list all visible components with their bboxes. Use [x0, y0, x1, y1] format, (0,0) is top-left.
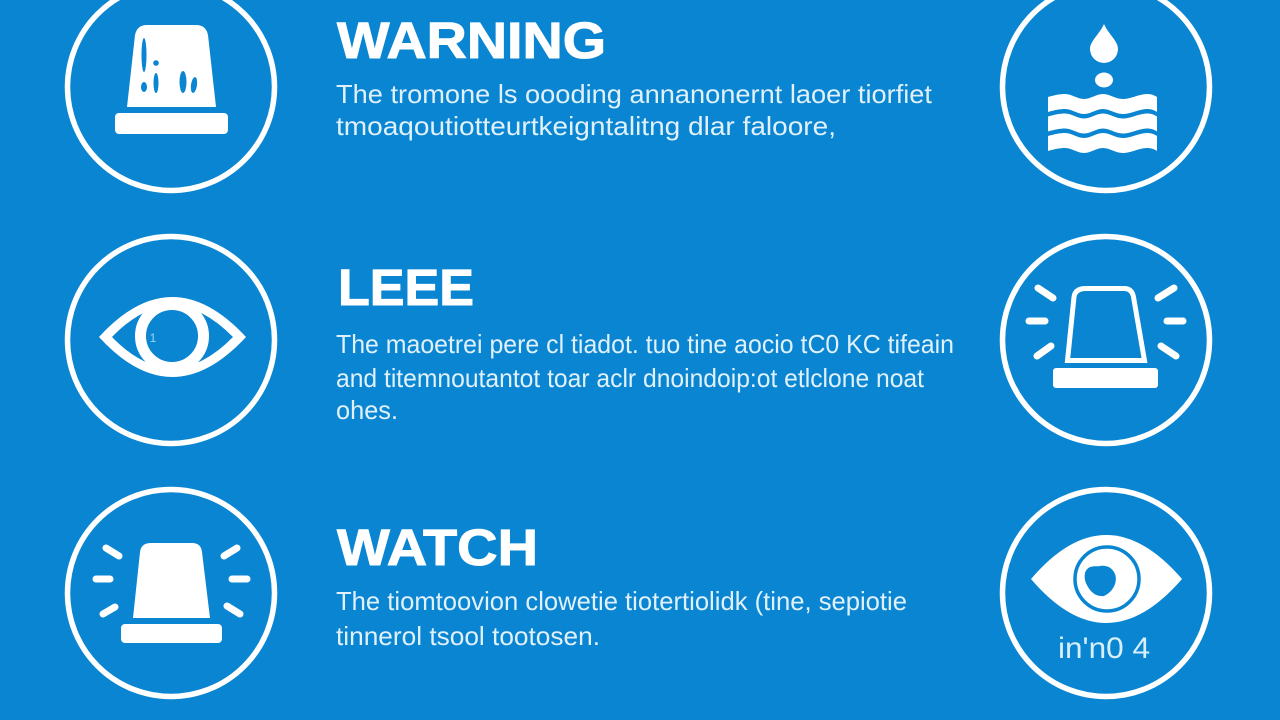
icon: solid eye with label: [1002, 490, 1210, 696]
text block: leee description: ohes.: [336, 395, 398, 425]
icon: outline eye: 1: [150, 331, 157, 345]
heading: watch: WATCH: [337, 519, 538, 576]
icon: solid eye with label: in'n0 4: [1058, 632, 1150, 665]
heading: warning: WARNING: [337, 12, 606, 69]
text block: leee description: and titemnoutantot toar aclr dnoindoip:ot etlclone noat: [336, 363, 925, 393]
text block: leee description: The maoetrei pere cl tiadot. tuo tine aocio tC0 KC tifeain: [336, 329, 954, 359]
icon: solid beacon with marks: [68, 0, 274, 190]
heading: leee: LEEE: [338, 259, 474, 316]
text block: warning description: The tromone ls oooding annanonernt laoer tiorfiet: [336, 79, 933, 109]
text block: warning description: [336, 79, 933, 141]
text block: watch description: tinnerol tsool tootosen.: [336, 621, 600, 651]
text block: leee description: [336, 329, 954, 425]
icon: outline beacon with rays: [1002, 236, 1210, 444]
text block: watch description: [336, 586, 907, 651]
text block: watch description: The tiomtoovion clowetie tiotertiolidk (tine, sepiotie: [336, 586, 907, 616]
icon: outline eye: [68, 236, 274, 444]
icon: water drop and waves: [1002, 0, 1210, 190]
text block: warning description: tmoaqoutiotteurtkeigntalitng dlar faloore,: [336, 111, 836, 141]
icon: solid beacon with rays: [68, 490, 274, 696]
